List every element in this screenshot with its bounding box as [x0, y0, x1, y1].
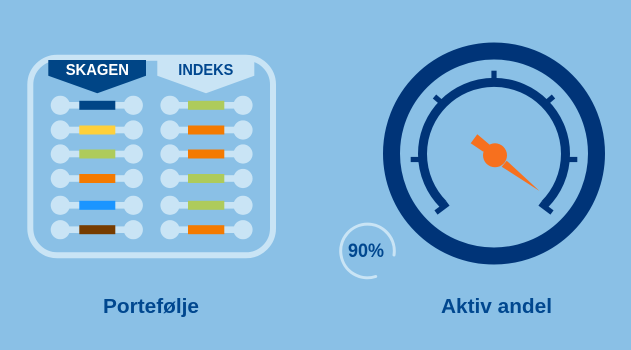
banner: INDEKS: INDEKS	[178, 62, 234, 79]
banner: SKAGEN: SKAGEN	[66, 62, 129, 79]
gauge outer ring	[392, 51, 596, 256]
gauge needle	[471, 134, 540, 191]
gauge scale arc and ticks	[411, 71, 577, 212]
heading: Portefølje: Portefølje	[103, 295, 199, 318]
progress ring: 90%: 90%	[348, 241, 384, 262]
progress ring: 90%	[341, 224, 394, 278]
panel: portfolio frame	[30, 58, 273, 255]
column: INDEKS holdings	[160, 96, 253, 239]
heading: Aktiv andel: Aktiv andel	[441, 295, 552, 318]
banner: SKAGEN	[48, 60, 146, 93]
banner: INDEKS	[157, 60, 254, 93]
gauge	[392, 51, 596, 256]
column: SKAGEN holdings	[51, 96, 143, 239]
